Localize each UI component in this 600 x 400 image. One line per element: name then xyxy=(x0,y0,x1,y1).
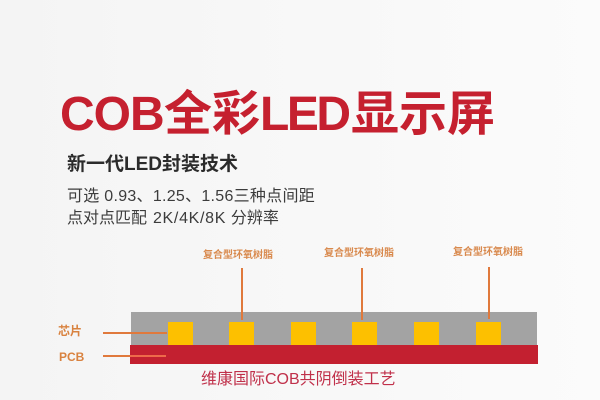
caption: 维康国际COB共阴倒装工艺 xyxy=(201,371,396,388)
title: LED xyxy=(260,88,348,141)
title xyxy=(60,88,495,141)
diagram: PCB layer xyxy=(130,345,538,364)
label: resin 2: 复合型环氧树脂 xyxy=(324,248,394,259)
label: resin 3: 复合型环氧树脂 xyxy=(453,247,523,258)
label: chip: 芯片 xyxy=(58,324,82,338)
subtitle: 新一代LED封装技术 xyxy=(67,154,238,175)
leader line: resin 3 xyxy=(488,267,490,319)
leader line: chip xyxy=(103,332,167,334)
text: pixel mapping: 点对点匹配 2K/4K/8K 分辨率 xyxy=(67,210,279,227)
label: resin 1: 复合型环氧树脂 xyxy=(203,250,273,261)
diagram: encapsulation layer xyxy=(131,312,537,345)
text: pitch options: 可选 0.93、1.25、1.56三种点间距 xyxy=(67,188,315,205)
label: PCB: PCB xyxy=(59,350,84,364)
title: COB xyxy=(60,88,164,141)
title: 显示屏 xyxy=(351,88,495,141)
leader line: resin 2 xyxy=(361,268,363,320)
leader line: resin 1 xyxy=(241,268,243,320)
title: 全彩 xyxy=(164,88,260,141)
leader line: PCB xyxy=(103,355,166,357)
